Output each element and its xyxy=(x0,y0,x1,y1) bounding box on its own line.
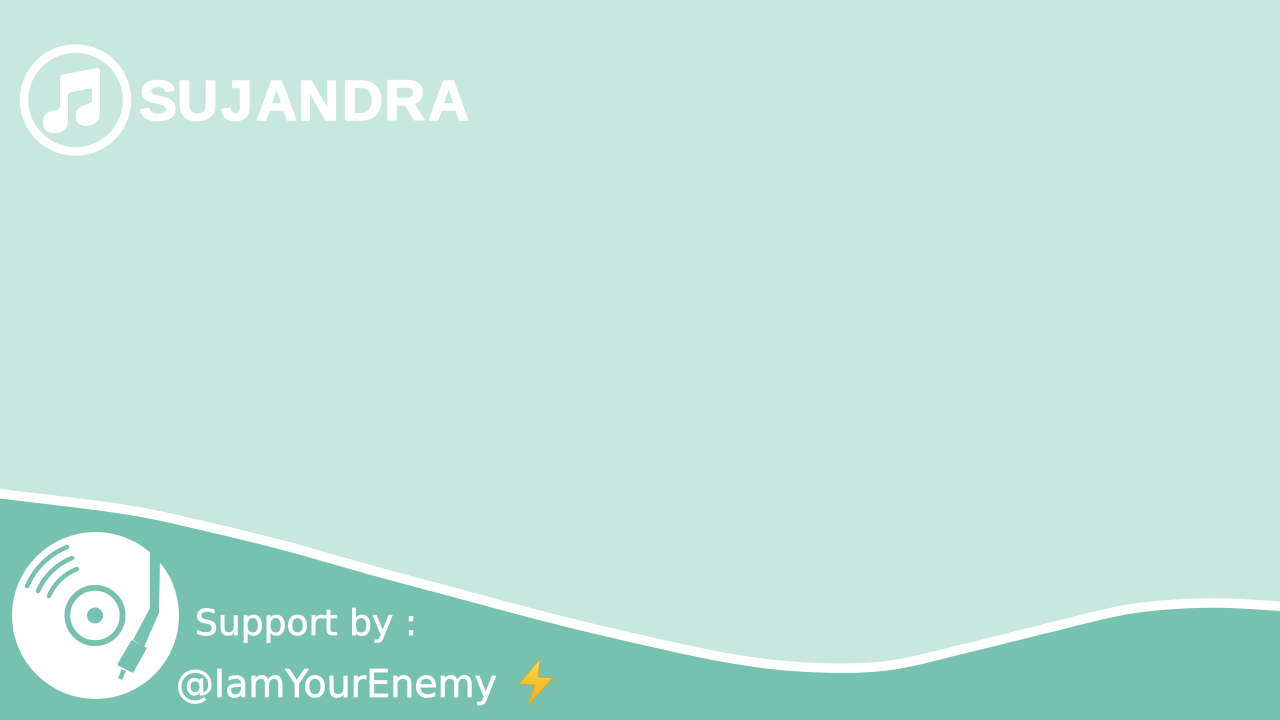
support label: Support by : xyxy=(195,603,417,644)
icon: lightning bolt xyxy=(519,659,553,705)
wordmark: SUJANDRA xyxy=(139,69,469,133)
icon: music note in ring xyxy=(24,48,127,152)
tonearm xyxy=(117,545,160,673)
icon: vinyl record with tonearm xyxy=(12,532,179,699)
handle: @IamYourEnemy xyxy=(176,662,497,706)
record grooves xyxy=(27,547,77,596)
wave: green footer band with white edge xyxy=(0,492,1280,720)
logo: Sujandra xyxy=(24,48,469,152)
record centre label xyxy=(67,588,123,643)
